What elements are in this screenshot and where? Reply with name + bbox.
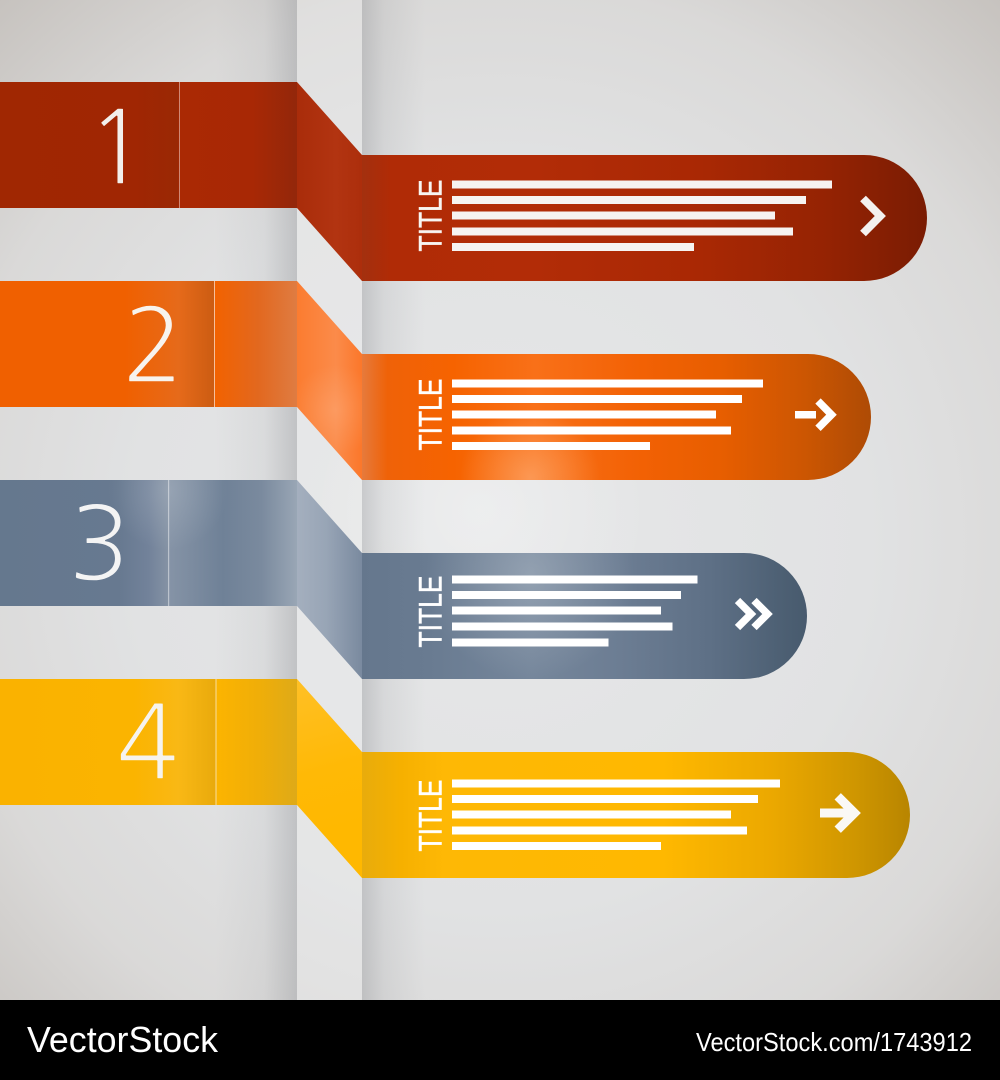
pill panel bbox=[362, 752, 910, 878]
fold connector bbox=[297, 480, 362, 679]
text lines bbox=[452, 380, 763, 450]
left tab with number 3: 3 bbox=[69, 493, 130, 595]
icon: line arrow bbox=[795, 401, 832, 428]
fold connector bbox=[297, 679, 362, 878]
pill highlight bbox=[425, 553, 635, 679]
fold connector bbox=[297, 281, 362, 480]
footer logo text: VectorStock bbox=[27, 1019, 219, 1060]
fold connector bbox=[297, 82, 362, 281]
left tab with number 4 bbox=[0, 679, 297, 805]
banner 1: red bbox=[0, 82, 927, 281]
pill panel bbox=[362, 354, 871, 480]
left tab with number 4: 4 bbox=[117, 692, 178, 794]
banner 4: yellow bbox=[0, 679, 910, 878]
pill highlight bbox=[440, 410, 620, 480]
pill panel bbox=[362, 155, 927, 281]
left tab with number 2 bbox=[0, 281, 297, 407]
icon: bold arrow bbox=[820, 796, 854, 830]
label: title: TITLE bbox=[413, 180, 449, 252]
text lines bbox=[452, 576, 698, 646]
label: title: TITLE bbox=[413, 780, 449, 852]
footer bar bbox=[0, 1000, 1000, 1080]
left tab with number 2: 2 bbox=[122, 294, 184, 396]
banner 2: orange bbox=[0, 281, 871, 480]
fold highlight bbox=[297, 281, 362, 480]
icon: chevron arrow bbox=[863, 198, 880, 234]
left tab with number 1 bbox=[0, 82, 297, 208]
banner 3: slate bbox=[0, 480, 807, 679]
left tab with number 3 bbox=[0, 480, 297, 606]
text lines bbox=[452, 180, 832, 251]
pill panel bbox=[362, 553, 807, 679]
footer url text: VectorStock.com/1743912 bbox=[696, 1027, 972, 1057]
left tab with number 1: 1 bbox=[86, 96, 148, 198]
label: title: TITLE bbox=[413, 576, 449, 648]
icon: double chevron bbox=[738, 600, 768, 628]
label: title: TITLE bbox=[413, 378, 449, 450]
text lines bbox=[452, 780, 780, 850]
